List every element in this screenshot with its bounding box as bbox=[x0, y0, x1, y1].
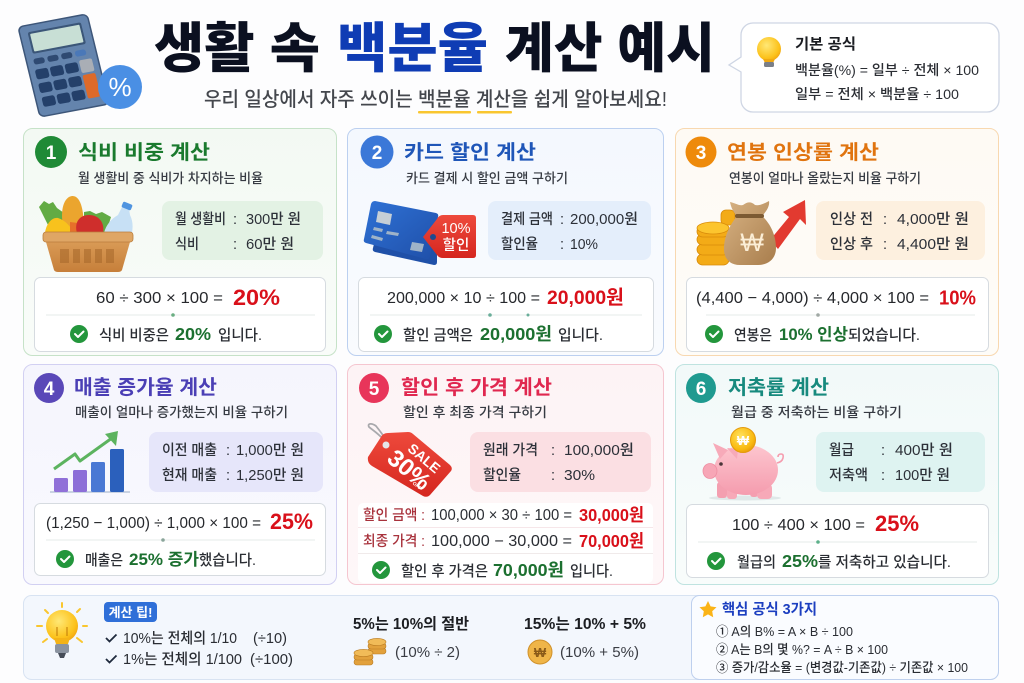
card 6 given values: : bbox=[881, 443, 885, 459]
number badge 3: 3 bbox=[696, 143, 706, 164]
callout: basic formula: 기본 공식 bbox=[795, 36, 856, 53]
card 6 calculation: 100 ÷ 400 × 100 = bbox=[732, 517, 865, 534]
number badge 1: 1 bbox=[46, 143, 57, 164]
card 2 calculation: 할인 금액은 bbox=[403, 327, 473, 344]
card 5 calculation: 할인 금액 : bbox=[363, 507, 425, 524]
card 6 heading: 저축률 계산 bbox=[728, 376, 829, 399]
title: 백분율 bbox=[337, 19, 488, 79]
card 1 given values: 60만 원 bbox=[246, 236, 294, 253]
number badge 2 bbox=[360, 136, 394, 168]
card 1 heading: 식비 비중 계산 bbox=[78, 141, 210, 164]
icon: star bbox=[700, 601, 716, 617]
card 1 calculation: 20% bbox=[233, 285, 280, 310]
card 3 given values bbox=[816, 201, 985, 260]
card 5 calculation: 70,000원 bbox=[579, 531, 644, 551]
icon: piggy bank with coin bbox=[703, 428, 783, 500]
number badge 6: 6 bbox=[696, 379, 706, 400]
card 1 calculation bbox=[34, 278, 326, 352]
card 4 calculation: 25% 증가 bbox=[129, 550, 199, 569]
card 5 heading: 할인 후 가격 계산 bbox=[401, 376, 552, 399]
number badge 4 bbox=[34, 373, 64, 403]
key formula list: ② A는 B의 몇 %? = A ÷ B × 100 bbox=[716, 642, 888, 657]
card 5 given values: 할인율 bbox=[483, 467, 521, 484]
tip list: (÷10) bbox=[253, 630, 287, 647]
icon: calculator with percent badge: % bbox=[108, 72, 132, 102]
tip: fifteen percent: (10% + 5%) bbox=[560, 645, 639, 661]
card 3 calculation: (4,400 − 4,000) ÷ 4,000 × 100 = bbox=[696, 290, 929, 307]
tip list bbox=[106, 630, 293, 668]
tip: fifteen percent bbox=[524, 615, 646, 664]
card 5 given values: : bbox=[551, 468, 555, 484]
card 5 calculation: 100,000 × 30 ÷ 100 = bbox=[431, 507, 572, 524]
panel: 2 card discount bbox=[348, 128, 664, 356]
card 1 given values bbox=[162, 201, 323, 260]
card 3 calculation: 되었습니다. bbox=[848, 327, 920, 344]
icon: sale tag 30% off: 30% bbox=[382, 444, 436, 496]
panel: calculation tips bbox=[24, 596, 998, 680]
card 3 heading: 연봉 인상률 계산 bbox=[727, 141, 879, 164]
card 3 calculation: 10% 인상 bbox=[779, 325, 848, 344]
card 4 description: 매출이 얼마나 증가했는지 비율 구하기 bbox=[75, 405, 288, 420]
number badge 5: 5 bbox=[369, 379, 380, 400]
card 4 given values bbox=[149, 432, 323, 492]
icon: credit cards with discount tag: 할인 bbox=[443, 237, 469, 254]
card 3 calculation: 10% bbox=[939, 288, 976, 310]
card 4 given values: : bbox=[226, 468, 230, 484]
key formulas heading: 핵심 공식 3가지 bbox=[722, 601, 817, 618]
number badge 2: 2 bbox=[372, 143, 382, 164]
icon: glowing light bulb bbox=[37, 603, 87, 658]
card 2 heading: 카드 할인 계산 bbox=[404, 141, 536, 164]
panel: 3 salary raise bbox=[676, 128, 998, 356]
card 4 calculation bbox=[34, 504, 326, 576]
card 2 given values: : bbox=[560, 237, 564, 253]
card 6 calculation bbox=[686, 504, 988, 578]
tip list: (÷100) bbox=[250, 651, 293, 668]
card 4 given values: 현재 매출 bbox=[162, 467, 217, 484]
key formula list: ③ 증가/감소율 = (변경값-기존값) ÷ 기존값 × 100 bbox=[716, 660, 968, 675]
card 2 calculation: 200,000 × 10 ÷ 100 = bbox=[387, 290, 540, 307]
card 6 calculation: 25% bbox=[875, 511, 919, 536]
card 2 calculation: 입니다. bbox=[558, 327, 603, 344]
panel: 1 food expense ratio bbox=[24, 128, 336, 356]
card 4 given values: 이전 매출 bbox=[162, 442, 217, 459]
card 3 given values: 4,400만 원 bbox=[897, 236, 969, 253]
badge: calculation tip bbox=[104, 602, 157, 622]
card 6 given values: 100만 원 bbox=[895, 467, 950, 484]
card 2 calculation: 20,000원 bbox=[547, 287, 624, 309]
card 2 calculation: 20,000원 bbox=[480, 324, 552, 344]
card 2 given values: 할인율 bbox=[501, 236, 538, 253]
card 5 given values: 30% bbox=[564, 468, 595, 484]
card 2 given values: 결제 금액 bbox=[501, 211, 553, 228]
panel: 6 savings rate bbox=[676, 364, 998, 584]
card 6 calculation: 월급의 bbox=[737, 554, 776, 571]
card 3 given values: : bbox=[883, 212, 887, 228]
panel: 5 price after discount bbox=[348, 364, 664, 584]
number badge 5 bbox=[359, 373, 389, 403]
number badge 6 bbox=[686, 373, 716, 403]
badge: calculation tip: 계산 팁! bbox=[109, 605, 152, 620]
card 4 calculation: 했습니다. bbox=[199, 552, 256, 569]
card 6 given values: 저축액 bbox=[829, 467, 868, 484]
card 1 given values: 300만 원 bbox=[246, 211, 301, 228]
card 5 calculation: 할인 후 가격은 bbox=[401, 563, 488, 580]
icon: piggy bank with coin: ₩ bbox=[737, 433, 750, 448]
tip list: 10%는 전체의 1/10 bbox=[123, 630, 237, 647]
card 1 calculation: 20% bbox=[175, 324, 211, 344]
card 5 given values bbox=[470, 432, 651, 492]
card 6 given values bbox=[816, 432, 985, 492]
card 1 calculation: 식비 비중은 bbox=[99, 327, 169, 344]
tip: fifteen percent: 15%는 10% + 5% bbox=[524, 615, 646, 633]
card 5 calculation: 100,000 − 30,000 = bbox=[431, 533, 572, 550]
panel: 4 sales growth bbox=[24, 364, 336, 584]
card 4 given values: 1,000만 원 bbox=[236, 442, 304, 459]
card 3 given values: 인상 후 bbox=[830, 236, 873, 253]
tip list: 1%는 전체의 1/100 bbox=[123, 651, 242, 668]
icon: sale tag 30% off: OFF bbox=[411, 481, 422, 492]
card 1 calculation: 입니다. bbox=[218, 327, 262, 344]
card 2 given values: 10% bbox=[570, 237, 598, 253]
card 6 description: 월급 중 저축하는 비율 구하기 bbox=[731, 404, 902, 420]
tip: five percent: (10% ÷ 2) bbox=[395, 645, 460, 661]
icon: sale tag 30% off: SALE bbox=[405, 440, 444, 476]
card 3 description: 연봉이 얼마나 올랐는지 비율 구하기 bbox=[729, 171, 921, 186]
card 5 given values: 원래 가격 bbox=[483, 442, 538, 459]
tip: five percent: 5%는 10%의 절반 bbox=[353, 615, 469, 633]
card 6 calculation: 를 저축하고 있습니다. bbox=[818, 554, 951, 571]
card 2 description: 카드 결제 시 할인 금액 구하기 bbox=[406, 170, 568, 186]
card 5 calculation: 30,000원 bbox=[579, 505, 644, 525]
callout: basic formula bbox=[729, 23, 999, 112]
callout: basic formula: 일부 = 전체 × 백분율 ÷ 100 bbox=[795, 86, 959, 102]
key formula list bbox=[716, 624, 968, 675]
chart: rising bars with green arrow bbox=[50, 431, 130, 493]
card 5 calculation: 입니다. bbox=[570, 563, 613, 580]
subtitle: 우리 일상에서 자주 쓰이는 백분율 계산을 쉽게 알아보세요! bbox=[204, 88, 667, 111]
card 6 calculation: 25% bbox=[782, 551, 818, 571]
icon: credit cards with discount tag: 10% bbox=[441, 221, 471, 237]
card 1 given values: : bbox=[233, 237, 237, 253]
icon: grocery basket bbox=[39, 196, 133, 272]
card 5 given values: 100,000원 bbox=[564, 442, 634, 459]
card 1 given values: : bbox=[233, 212, 237, 228]
card 3 calculation: 연봉은 bbox=[734, 327, 772, 344]
card 3 given values: 4,000만 원 bbox=[897, 211, 969, 228]
title bbox=[154, 19, 715, 79]
card 1 given values: 식비 bbox=[175, 236, 199, 253]
tip: five percent bbox=[353, 615, 469, 665]
card 5 calculation: 최종 가격 : bbox=[363, 533, 425, 550]
card 5 calculation: 70,000원 bbox=[493, 560, 564, 580]
card 2 given values bbox=[488, 201, 651, 260]
icon: sale tag 30% off bbox=[368, 424, 452, 497]
card 6 given values: 400만 원 bbox=[895, 442, 953, 459]
number badge 4: 4 bbox=[44, 379, 55, 400]
icon: light bulb bbox=[757, 37, 781, 67]
title: 생활 속 bbox=[154, 19, 320, 79]
number badge 1 bbox=[35, 136, 67, 168]
card 4 calculation: (1,250 − 1,000) ÷ 1,000 × 100 = bbox=[46, 515, 261, 532]
callout: basic formula: 백분율(%) = 일부 ÷ 전체 × 100 bbox=[795, 62, 979, 78]
card 1 given values: 월 생활비 bbox=[175, 211, 226, 228]
card 4 given values: : bbox=[226, 443, 230, 459]
card 1 description: 월 생활비 중 식비가 차지하는 비율 bbox=[78, 170, 263, 186]
key formula list: ① A의 B% = A × B ÷ 100 bbox=[716, 624, 853, 639]
card 6 given values: : bbox=[881, 468, 885, 484]
card 3 given values: 인상 전 bbox=[830, 211, 873, 228]
card 1 calculation: 60 ÷ 300 × 100 = bbox=[96, 290, 223, 307]
card 4 heading: 매출 증가율 계산 bbox=[74, 376, 217, 399]
panel: three key formulas bbox=[692, 596, 998, 680]
icon: credit cards with discount tag bbox=[364, 201, 476, 265]
title: 계산 예시 bbox=[505, 19, 715, 79]
card 2 given values: 200,000원 bbox=[570, 211, 638, 228]
card 3 calculation bbox=[686, 278, 988, 352]
card 4 calculation: 25% bbox=[270, 509, 313, 534]
card 4 given values: 1,250만 원 bbox=[236, 467, 304, 484]
card 3 given values: : bbox=[883, 237, 887, 253]
card 4 calculation: 매출은 bbox=[85, 552, 123, 569]
number badge 3 bbox=[686, 136, 716, 168]
card 5 given values: : bbox=[551, 443, 555, 459]
card 5 calculation bbox=[358, 503, 653, 583]
icon: coins, money bag and rising arrow bbox=[697, 200, 806, 265]
card 2 calculation bbox=[358, 278, 654, 352]
card 5 description: 할인 후 최종 가격 구하기 bbox=[403, 404, 547, 420]
icon: calculator with percent badge bbox=[18, 14, 142, 117]
card 6 given values: 월급 bbox=[829, 442, 854, 459]
card 2 given values: : bbox=[560, 212, 564, 228]
tip: fifteen percent: ₩ bbox=[534, 645, 547, 660]
icon: coins, money bag and rising arrow: ₩ bbox=[740, 229, 764, 257]
